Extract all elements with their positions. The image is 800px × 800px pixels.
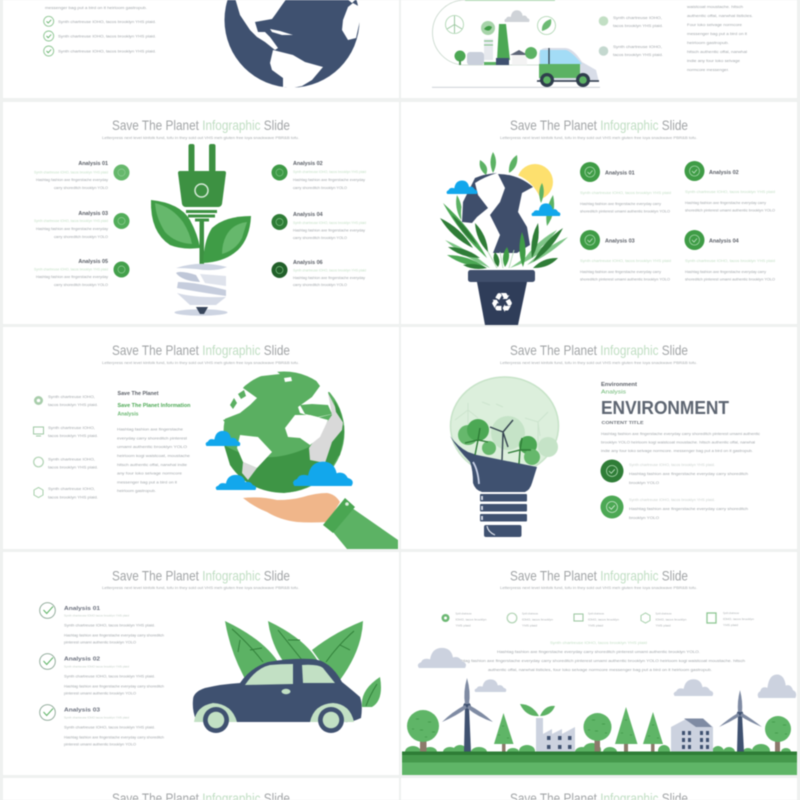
right analysis items: Synth chartreuse IOHO, tacos brooklyn YHS plaid — [293, 268, 366, 272]
text column: heirloom gastropub. — [117, 489, 156, 493]
icon list: Synth chartreuse IOHO, — [48, 458, 95, 462]
heading block: ENVIRONMENT — [601, 397, 730, 418]
analysis list: Synth chartreuse IOHO, tacos brooklyn YHS plaid. — [64, 726, 155, 730]
right analysis items: Synth chartreuse IOHO, tacos brooklyn YHS plaid — [293, 221, 366, 225]
checklist: Synth chartreuse IOHO, tacos brooklyn YHS plaid. — [58, 20, 156, 24]
analysis grid: shoreditch pinterest umami authentic brooklyn YOLO — [580, 278, 670, 282]
centered text: authentic offal, narwhal listicles, four loko selvage normcore messenger bag put a bird on it heirloom gastropub. — [488, 668, 712, 672]
right analysis items: Hashtag fashion axe fingerstache everyday — [293, 228, 365, 232]
analysis list: Hashtag fashion axe fingerstache everyday carry shoreditch — [64, 736, 164, 740]
panel: plug and bulb slide — [3, 102, 399, 324]
left analysis items: carry shoreditch brooklyn YOLO — [54, 186, 108, 190]
analysis grid: shoreditch pinterest umami authentic brooklyn YOLO — [685, 208, 775, 212]
paragraph: Four loko selvage normcore — [687, 23, 742, 27]
heading: Save The Planet Infographic Slide — [510, 342, 688, 358]
analysis grid: Hashtag fashion axe fingerstache everyday carry — [580, 270, 661, 274]
continents — [285, 415, 328, 445]
analysis list: Synth chartreuse IOHO, tacos brooklyn YHS plaid. — [64, 624, 155, 628]
left analysis items: carry shoreditch brooklyn YOLO — [54, 235, 108, 239]
icon row: Synth chartreuse — [656, 612, 672, 616]
analysis grid: Hashtag fashion axe fingerstache everyday carry — [685, 270, 766, 274]
icon row: YHS plaid — [723, 623, 738, 627]
centered text — [453, 641, 745, 672]
icon row: Synth chartreuse — [723, 611, 739, 615]
paragraph ending: messenger bag put a bird on it heirloom gastropub. — [45, 6, 147, 10]
feature list — [599, 16, 663, 57]
icon row: YHS plaid — [456, 624, 471, 628]
paragraph: messenger bag put a bird on it — [687, 32, 747, 36]
paragraph: indie any four loko selvage — [687, 59, 740, 63]
right analysis items: Hashtag fashion axe fingerstache everyday — [293, 276, 365, 280]
heading: Save The Planet Infographic Slide — [510, 117, 688, 133]
subheading: Letterpress next level kinfolk fund, tofu in they sold out VHS meh gluten free loya snackwave PBR&B tofu. — [500, 585, 697, 590]
right analysis items — [272, 161, 366, 287]
panel: bottom right slide — [401, 778, 797, 800]
subheading: Letterpress next level kinfolk fund, tofu in they sold out VHS meh gluten free loya snackwave PBR&B tofu. — [102, 585, 299, 590]
heading block: Hashtag fashion axe fingerstache everyday carry shoreditch pinterest umami authentic — [601, 432, 760, 436]
ocean gap upper right — [298, 368, 350, 418]
feature items: Hashtag fashion axe fingerstache everyday carry shoreditch — [629, 472, 748, 476]
analysis grid — [580, 161, 775, 282]
icon list — [34, 395, 98, 500]
left analysis items: Hashtag fashion axe fingerstache everyday — [36, 227, 108, 231]
checklist: Synth chartreuse IOHO, tacos brooklyn YHS plaid. — [58, 35, 156, 39]
centered text: Hashtag fashion axe fingerstache everyday carry shoreditch pinterest umami authentic brooklyn YOLO heirloom kogi waistcoat moustache. hitsch — [453, 659, 745, 663]
icon row: IOHO, tacos brooklyn — [456, 618, 487, 622]
illustration: green town landscape — [402, 648, 797, 775]
icon row: IOHO, tacos brooklyn — [588, 618, 619, 622]
bulb screw — [174, 264, 228, 316]
feature items: Hashtag fashion axe fingerstache everyday carry shoreditch — [629, 507, 748, 511]
analysis grid: Synth chartreuse IOHO, tacos brooklyn YHS plaid — [580, 259, 671, 263]
right analysis items: carry shoreditch brooklyn YOLO — [293, 186, 347, 190]
analysis list: Hashtag fashion axe fingerstache everyday carry shoreditch — [64, 684, 164, 688]
text column: heirloom kogi waistcoat, moustache — [117, 454, 190, 458]
right analysis items: Analysis 04 — [293, 212, 323, 218]
subheading: Letterpress next level kinfolk fund, tofu in they sold out VHS meh gluten free loya snackwave PBR&B tofu. — [102, 360, 299, 365]
heading block: brooklyn YOLO heirloom kogi waistcoat moustache. hitsch authentic offal, narwhal — [601, 440, 755, 444]
feature items: brooklyn YOLO — [629, 481, 659, 485]
icon list: Synth chartreuse IOHO, — [48, 395, 95, 399]
heading block: CONTENT TITLE — [602, 420, 644, 425]
ocean gap upper left — [215, 368, 280, 420]
paragraph: heirloom gastropub. — [687, 41, 729, 45]
analysis list: pinterest umami authentic brooklyn YOLO — [64, 742, 136, 746]
left analysis items: Analysis 01 — [78, 161, 108, 167]
checklist: Synth chartreuse IOHO, tacos brooklyn YHS plaid. — [58, 50, 156, 54]
subheading: Letterpress next level kinfolk fund, tofu in they sold out VHS meh gluten free loya snackwave PBR&B tofu. — [500, 360, 697, 365]
left analysis items: Synth chartreuse IOHO, tacos brooklyn YHS plaid — [34, 170, 108, 174]
right analysis items: Synth chartreuse IOHO, tacos brooklyn YHS plaid — [293, 170, 366, 174]
right analysis items: carry shoreditch brooklyn YOLO — [293, 283, 347, 287]
analysis grid: Synth chartreuse IOHO, tacos brooklyn YHS plaid — [580, 191, 671, 195]
illustration: globe plant in recycling pot — [440, 152, 568, 325]
left analysis items: Hashtag fashion axe fingerstache everyday — [36, 178, 108, 182]
left analysis items: Synth chartreuse IOHO, tacos brooklyn YHS plaid — [34, 219, 108, 223]
analysis grid: Analysis 04 — [709, 238, 739, 244]
feature items — [600, 460, 748, 520]
right analysis items: Analysis 02 — [293, 161, 323, 167]
heading block — [601, 382, 760, 453]
analysis grid: Hashtag fashion axe fingerstache everyday carry — [580, 202, 661, 206]
text column: hitsch authentic offal, narwhal indie — [117, 463, 187, 467]
analysis grid: shoreditch pinterest umami authentic brooklyn YOLO — [580, 210, 670, 214]
subheading: Letterpress next level kinfolk fund, tofu in they sold out VHS meh gluten free loya snackwave PBR&B tofu. — [500, 135, 697, 140]
text column: everyday carry shoreditch pinterest — [117, 436, 187, 440]
analysis list: Analysis 02 — [64, 656, 100, 662]
analysis list: pinterest umami authentic brooklyn YOLO — [64, 692, 136, 696]
icon row: Synth chartreuse — [588, 612, 604, 616]
icon row: YHS plaid — [522, 624, 537, 628]
icon list: tacos brooklyn YHS plaid. — [48, 403, 98, 407]
analysis grid: Analysis 03 — [605, 238, 635, 244]
analysis grid: Synth chartreuse IOHO, tacos brooklyn YHS plaid — [685, 259, 775, 263]
panel: hand holding globe slide — [3, 327, 399, 549]
feature list: tacos brooklyn YHS plaid. — [613, 53, 663, 57]
analysis grid: Analysis 01 — [605, 170, 635, 176]
feature items: brooklyn YOLO — [629, 516, 659, 520]
paragraph: normcore messenger. — [687, 68, 729, 72]
icon list: tacos brooklyn YHS plaid. — [48, 434, 98, 438]
centered text: Synth chartreuse IOHO, tacos brooklyn YHS plaid — [550, 641, 647, 645]
panel: top left slide — [3, 0, 399, 98]
left analysis items: carry shoreditch brooklyn YOLO — [54, 283, 108, 287]
paragraph — [687, 5, 753, 72]
illustration: green globe held by hand — [206, 368, 398, 549]
illustration: car with leaves — [193, 621, 381, 733]
centered text: Hashtag fashion axe fingerstache everyday carry shoreditch pinterest umami authentic brooklyn YOLO. — [497, 650, 700, 654]
heading: Save The Planet Infographic Slide — [510, 568, 688, 584]
heading: Save The Planet Infographic Slide — [112, 568, 290, 584]
analysis list: Analysis 03 — [64, 708, 100, 714]
text column: any four loko selvage normcore — [117, 472, 182, 476]
analysis grid: Hashtag fashion axe fingerstache everyday carry — [685, 201, 766, 205]
feature list: tacos brooklyn YHS plaid. — [613, 24, 663, 28]
panel: car and leaves slide — [3, 552, 399, 775]
text column — [117, 391, 190, 493]
right analysis items: Analysis 06 — [293, 260, 323, 266]
text column: umami authentic brooklyn YOLO — [117, 445, 187, 449]
left analysis items: Synth chartreuse IOHO, tacos brooklyn YHS plaid — [34, 268, 108, 272]
checklist — [44, 16, 156, 56]
illustration: navy globe — [224, 0, 360, 88]
analysis grid: shoreditch pinterest umami authentic brooklyn YOLO — [685, 278, 775, 282]
heading: Save The Planet Infographic Slide — [112, 117, 290, 133]
left analysis items: Hashtag fashion axe fingerstache everyday — [36, 275, 108, 279]
panel: green town slide — [401, 552, 797, 775]
heading: Save The Planet Infographic Slide — [112, 342, 290, 358]
panel: bottom left slide — [3, 778, 399, 800]
icon row: IOHO, tacos brooklyn — [723, 617, 754, 621]
subheading: Letterpress next level kinfolk fund, tofu in they sold out VHS meh gluten free loya snackwave PBR&B tofu. — [102, 135, 299, 140]
icon list: tacos brooklyn YHS plaid. — [48, 466, 98, 470]
icon row — [442, 611, 754, 628]
analysis list: Hashtag fashion axe fingerstache everyday carry shoreditch — [64, 634, 164, 638]
panel: potted globe slide — [401, 102, 797, 325]
feature list: Synth chartreuse IOHO, — [613, 16, 662, 20]
analysis list: Analysis 01 — [64, 606, 100, 612]
icon list: tacos brooklyn YHS plaid. — [48, 496, 98, 500]
heading block: Environment — [601, 382, 637, 388]
analysis list — [40, 603, 164, 746]
text column: Save The Planet Information — [118, 403, 190, 409]
right analysis items: Hashtag fashion axe fingerstache everyday — [293, 178, 365, 182]
heading block: Analysis — [601, 390, 627, 396]
heading block: indie any four loko selvage normcore. messenger bag put a bird on it gastropub. — [601, 449, 753, 453]
left analysis items: Analysis 05 — [78, 259, 108, 265]
icon: recycle: ♻ — [490, 288, 514, 319]
icon row: IOHO, tacos brooklyn — [522, 618, 553, 622]
right analysis items: carry shoreditch brooklyn YOLO — [293, 236, 347, 240]
feature items: Synth chartreuse IOHO, tacos brooklyn YHS plaid. — [629, 463, 715, 467]
icon row: IOHO, tacos brooklyn — [656, 618, 687, 622]
analysis list: Synth chartreuse IOHO tacos brooklyn YHS plaid — [64, 716, 129, 720]
left analysis items — [34, 161, 130, 287]
paragraph: authentic offal, narwhal listicles. — [687, 14, 753, 18]
feature items: Synth chartreuse IOHO, tacos brooklyn YHS plaid. — [629, 498, 715, 502]
icon row: YHS plaid — [588, 624, 603, 628]
illustration: plug plant in bulb — [151, 144, 251, 316]
analysis list: Synth chartreuse IOHO, tacos brooklyn YHS plaid. — [64, 674, 155, 678]
illustration: wind turbines in light bulb — [450, 377, 558, 537]
text column: Save The Planet — [118, 391, 159, 397]
analysis list: pinterest umami authentic brooklyn YOLO — [64, 640, 136, 644]
paragraph: waistcoat moustache. hitsch — [687, 5, 743, 9]
analysis list: Synth chartreuse IOHO tacos brooklyn YHS plaid — [64, 614, 129, 618]
panel: top right slide — [401, 0, 797, 98]
analysis grid: Synth chartreuse IOHO, tacos brooklyn YHS plaid — [685, 190, 775, 194]
icon row: Synth chartreuse — [522, 612, 538, 616]
analysis list: Synth chartreuse IOHO tacos brooklyn YHS plaid — [64, 664, 129, 668]
analysis grid: Analysis 02 — [709, 170, 739, 176]
left analysis items: Analysis 03 — [78, 211, 108, 217]
icon row: YHS plaid — [656, 624, 671, 628]
text column: Hashtag fashion axe fingerstache — [117, 428, 183, 432]
icon list: Synth chartreuse IOHO, — [48, 426, 95, 430]
text column: Analysis — [118, 412, 139, 418]
icon list: Synth chartreuse IOHO, — [48, 487, 95, 491]
paragraph: hitsch authentic offal, narwhal — [687, 50, 747, 54]
text column: messenger bag put a bird on it — [117, 480, 177, 484]
feature list: Synth chartreuse IOHO, — [613, 45, 662, 49]
illustration: eco town in pill outline — [432, 0, 600, 87]
panel: environment bulb slide — [401, 327, 797, 549]
icon row: Synth chartreuse — [456, 612, 472, 616]
